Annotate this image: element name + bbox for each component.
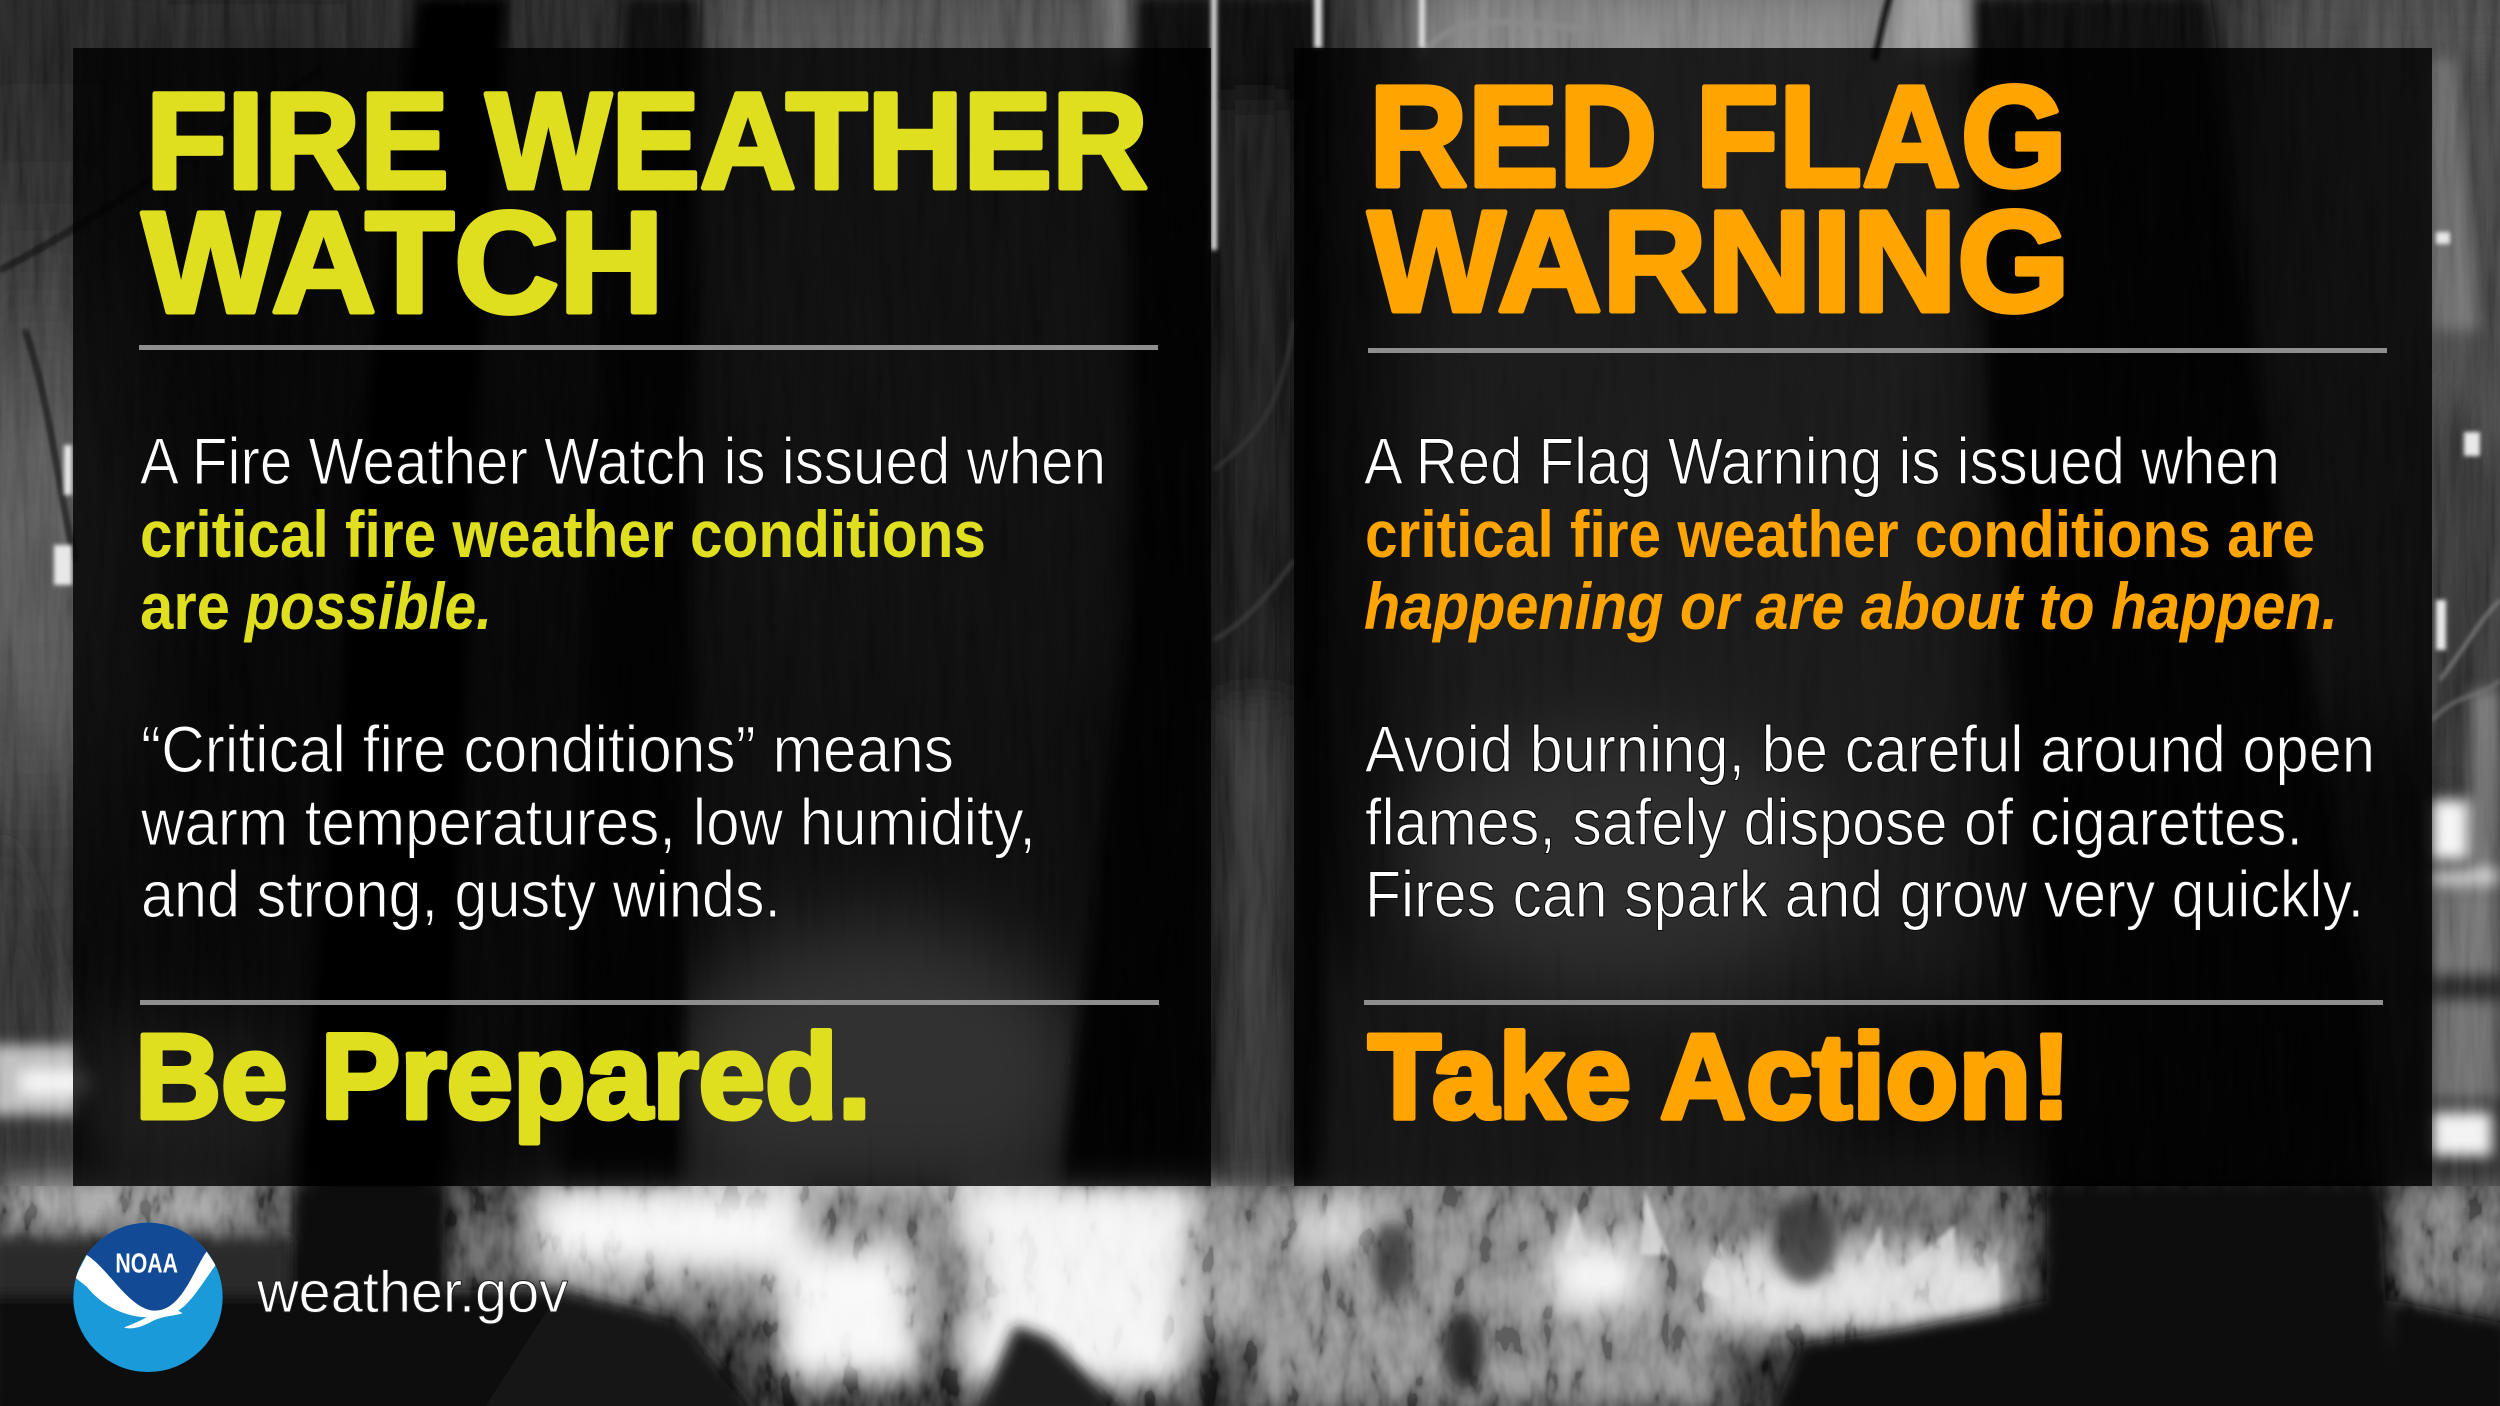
text: safety advice: flames, safely dispose of cigarettes.: [1365, 785, 2303, 859]
text: warning definition: [1364, 424, 2338, 643]
heading: red flag warning: RED FLAG: [1369, 56, 2067, 217]
text: watch definition: A Fire Weather Watch is issued when: [140, 424, 1106, 498]
text: watch definition: are: [140, 569, 230, 643]
call to action: take action: Take Action!: [1368, 1008, 2071, 1144]
text: warning definition: critical fire weather conditions are: [1365, 497, 2315, 571]
flame tongues: [1565, 1188, 2002, 1335]
call to action: be prepared: Be Prepared.: [135, 1008, 871, 1144]
text: critical conditions explanation: warm temperatures, low humidity,: [140, 785, 1036, 859]
text: warning definition: happening or are about to happen.: [1364, 569, 2338, 643]
text: safety advice: Fires can spark and grow very quickly.: [1365, 857, 2364, 931]
ground fire: low-frequency light and dark areas: [0, 1180, 2500, 1406]
text: safety advice: Avoid burning, be careful around open: [1365, 712, 2375, 786]
text: safety advice: [1365, 712, 2375, 931]
website label: weather.gov: [256, 1260, 568, 1325]
text: warning definition: A Red Flag Warning is issued when: [1364, 424, 2280, 498]
icon: NOAA logo: [73, 1222, 223, 1372]
heading: red flag warning: WARNING: [1368, 181, 2070, 342]
heading: fire weather watch: FIRE WEATHER: [146, 65, 1148, 218]
text: critical conditions explanation: “Critical fire conditions” means: [141, 712, 954, 786]
panel: red flag warning: [1294, 48, 2432, 1186]
text: critical conditions explanation: and strong, gusty winds.: [141, 857, 781, 931]
text: watch definition: critical fire weather conditions: [140, 497, 986, 571]
heading: fire weather watch: WATCH: [142, 182, 664, 343]
heading: fire weather watch: [142, 65, 1148, 343]
heading: red flag warning: [1368, 56, 2070, 342]
text: critical conditions explanation: [140, 712, 1036, 931]
text: watch definition: possible.: [243, 569, 492, 643]
ground shadows above the texture: [0, 1186, 2500, 1406]
text: watch definition: [140, 424, 1106, 643]
panel: fire weather watch: [73, 48, 1211, 1186]
bright trunk edges and branches: [0, 0, 2500, 720]
icon: NOAA logo: NOAA: [115, 1248, 178, 1279]
